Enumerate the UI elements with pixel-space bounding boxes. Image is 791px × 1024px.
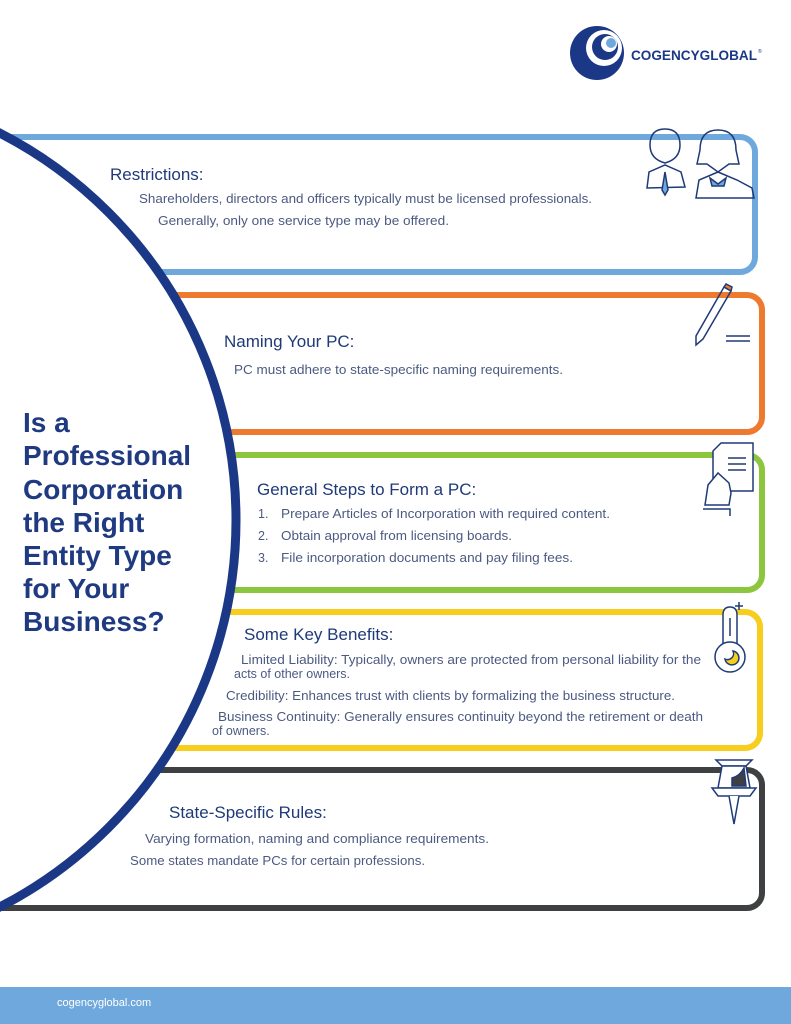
text block: state rules (130, 803, 489, 868)
text block: steps: General Steps to Form a PC: (257, 480, 476, 499)
text block: restrictions: Generally, only one service type may be offered. (158, 214, 449, 228)
logo (570, 26, 762, 80)
text block: benefits: of owners. (212, 724, 270, 738)
logo: COGENCYGLOBAL (631, 48, 757, 63)
title: Entity Type (23, 540, 172, 571)
text block: state rules: Varying formation, naming and compliance requirements. (145, 832, 489, 846)
text block: benefits: Limited Liability: Typically, owners are protected from personal liability for the (241, 653, 701, 667)
title: Professional (23, 440, 191, 471)
panel: state rules frame (0, 770, 762, 908)
text block: benefits: Credibility: Enhances trust with clients by formalizing the business structure. (226, 689, 675, 703)
text block: steps: File incorporation documents and pay filing fees. (281, 551, 573, 565)
icon: document in hand (703, 443, 753, 516)
title (23, 407, 191, 637)
title: for Your (23, 573, 129, 604)
icon: key (715, 602, 745, 672)
icon: push pin (712, 760, 756, 824)
text block: naming (224, 332, 563, 377)
text block: benefits: Some Key Benefits: (244, 625, 393, 644)
text block: naming: PC must adhere to state-specific naming requirements. (234, 363, 563, 377)
title: Corporation (23, 474, 183, 505)
panel: benefits frame (0, 612, 760, 748)
text block: benefits (212, 625, 703, 738)
icon: people (647, 129, 754, 198)
panel: steps frame (0, 455, 762, 590)
text block: steps: Prepare Articles of Incorporation with required content. (281, 507, 610, 521)
text block: steps (257, 480, 610, 565)
text block: steps: Obtain approval from licensing boards. (281, 529, 512, 543)
title: the Right (23, 507, 144, 538)
text block: restrictions (110, 165, 592, 228)
text block: steps: 2. (258, 529, 268, 543)
title: Is a (23, 407, 70, 438)
text block: naming: Naming Your PC: (224, 332, 354, 351)
arc: big circle (0, 85, 236, 955)
text block: state rules: State-Specific Rules: (169, 803, 327, 822)
panel: naming frame (0, 295, 762, 432)
text block: steps: 3. (258, 551, 268, 565)
icon: pen (696, 284, 750, 345)
text block: benefits: Business Continuity: Generally ensures continuity beyond the retirement or death (218, 710, 703, 724)
title: Business? (23, 606, 165, 637)
panel: restrictions frame (0, 137, 755, 272)
footer bar (0, 987, 791, 1024)
footer bar: cogencyglobal.com (57, 997, 151, 1009)
text block: state rules: Some states mandate PCs for certain professions. (130, 854, 425, 868)
text block: steps: 1. (258, 507, 268, 521)
text block: benefits: acts of other owners. (234, 667, 350, 681)
text block: restrictions: Restrictions: (110, 165, 204, 184)
logo: ® (758, 48, 762, 55)
text block: restrictions: Shareholders, directors and officers typically must be licensed professionals. (139, 192, 592, 206)
